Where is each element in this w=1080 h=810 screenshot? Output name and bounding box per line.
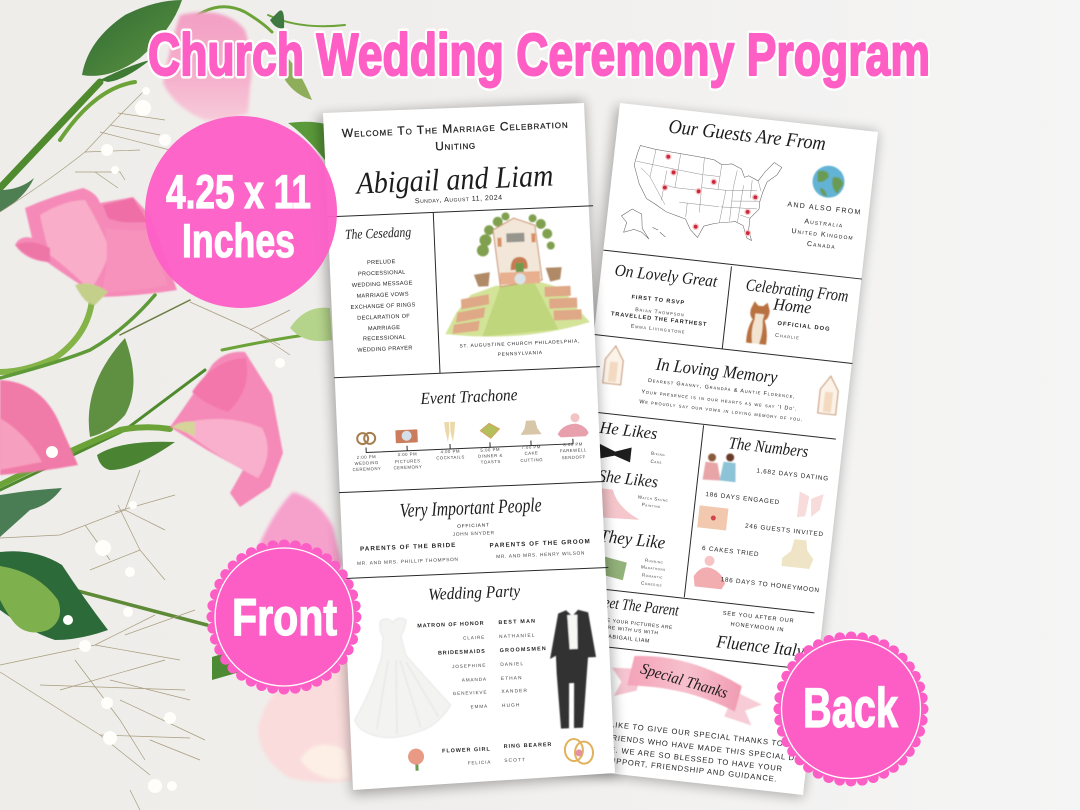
pink top bud [163, 12, 252, 120]
map pins [658, 154, 762, 236]
badge: back [779, 637, 923, 781]
panel: likes [582, 418, 682, 588]
panel: likes: Painting [641, 502, 661, 509]
middle pink flower [170, 352, 283, 507]
panel: order of ceremony: The Cesedang [345, 225, 411, 243]
pale peony [258, 655, 352, 782]
panel: likes: Cars [650, 459, 662, 465]
panel: event timeline: 3:00 PM [398, 451, 417, 457]
panel: event timeline: WEDDING [354, 460, 379, 466]
panel: very important people: JOHN SNYDER [453, 530, 495, 538]
panel: very important people: PARENTS OF THE GROOM [489, 538, 591, 549]
lawn [443, 280, 590, 339]
header: Abigail and Liam [354, 157, 554, 201]
panel: likes: Romantic [642, 572, 664, 580]
US map [619, 144, 782, 253]
foliage [475, 210, 555, 257]
panel: the numbers: 1,682 DAYS DATING [756, 468, 829, 483]
icon: tuxedo [548, 609, 599, 729]
panel: event timeline: PICTURES [395, 458, 421, 464]
icon: camera [395, 429, 418, 443]
panel: in loving memory: Dearest Granny, Grandpa & Auntie Florence, [648, 378, 796, 400]
icon: champagne hands [797, 491, 824, 520]
ribbon [607, 652, 766, 726]
icon: rings [357, 433, 375, 444]
icon: couple [703, 451, 739, 483]
panel: meet the parent: SHARE YOUR PICTURES ARE [591, 616, 673, 631]
icon: shoe [597, 488, 643, 522]
badge: 4.25 x 11 inches: Inches [182, 214, 295, 267]
badge: 4.25 x 11 inches: 4.25 x 11 [166, 165, 311, 218]
planters [474, 267, 562, 287]
also from list: Canada [807, 241, 836, 251]
panel: very important people: MR. AND MRS. HENRY WILSON [496, 550, 585, 560]
icon: bow tie [598, 444, 632, 462]
panel: order of ceremony: MARRIAGE [368, 325, 400, 332]
panel: event timeline: DINNER & [478, 453, 503, 459]
church caption: PENNSYLVANIA [498, 350, 543, 358]
panel: celebrating from home: Charlie [775, 333, 800, 341]
panel: the numbers [691, 431, 836, 600]
panel: wedding party [349, 578, 600, 773]
panel: order of ceremony: MARRIAGE VOWS [356, 292, 409, 300]
panel: special thanks [549, 646, 815, 787]
panel: very important people: MR. AND MRS. PHILLIP THOMPSON [357, 557, 459, 567]
church caption [459, 338, 581, 359]
panel: event timeline [349, 382, 590, 472]
icon: champagne [444, 422, 456, 442]
panel: likes: Running [645, 558, 664, 565]
panel: wedding party: BRIDESMAIDS [438, 649, 486, 657]
icon: cake [781, 538, 815, 569]
panel: wedding party: GROOMSMEN [500, 646, 547, 654]
panel: very important people: Very Important People [399, 494, 542, 522]
panel: order of ceremony [345, 225, 418, 354]
panel: event timeline: 4:00 PM [440, 449, 460, 454]
panel: order of ceremony: EXCHANGE OF RINGS [351, 302, 416, 311]
panel: honeymoon: HONEYMOON IN [730, 622, 785, 634]
panel: special thanks: FAMILY AND FRIENDS WHO HAVE MADE THIS SPECIAL DAY [551, 726, 806, 764]
icon: bouquet [408, 748, 425, 771]
panel: event timeline: SENDOFF [562, 454, 586, 460]
panel: wedding party: DANIEL [500, 661, 524, 668]
also from list [783, 201, 862, 253]
back card [538, 103, 878, 798]
panel: event timeline: TOASTS [481, 459, 501, 465]
icon: globe [811, 164, 846, 199]
icon: pink car [693, 554, 728, 590]
panel: likes: Watch Skiing [638, 494, 669, 503]
panel: very important people [354, 492, 591, 567]
panel: wedding party: XANDER [501, 688, 528, 695]
icon: car [557, 413, 589, 437]
panel: the numbers: 186 DAYS TO HONEYMOON [720, 576, 820, 594]
header [342, 117, 571, 208]
panel: wedding party: BEST MAN [498, 619, 536, 626]
panel: wedding party: FELICIA [468, 760, 491, 766]
icon: cake [520, 420, 542, 435]
panel: event timeline: CAKE [524, 450, 538, 456]
panel: the numbers: 246 GUESTS INVITED [745, 523, 824, 538]
panel: order of ceremony: PROCESSIONAL [358, 270, 406, 278]
panel: meet the parent: #ABIGAIL LIAM [604, 634, 650, 645]
panel: honeymoon: Fluence Italy [715, 631, 805, 661]
panel: wedding party: FLOWER GIRL [442, 747, 491, 755]
panel: on lovely great: Brian Thompson [635, 307, 685, 319]
panel: the numbers: The Numbers [728, 433, 810, 461]
panel: wedding party: CLAIRE [463, 635, 485, 641]
panel: on lovely great: TRAVELLED THE FARTHEST [611, 311, 708, 328]
panel: event timeline: FAREWELL [560, 447, 587, 453]
panel: the numbers: 6 CAKES TRIED [702, 545, 760, 558]
panel: event timeline: 7:00 PM [521, 444, 541, 450]
icon: gold rings [564, 738, 593, 764]
panel: special thanks: Special Thanks [638, 660, 730, 702]
panel: celebrating from home: Celebrating From [745, 275, 849, 306]
panel: event timeline: 5:00 PM [480, 447, 500, 453]
front card [318, 100, 618, 795]
icon: left lantern [603, 345, 625, 385]
panel: order of ceremony: PRELUDE [367, 259, 396, 266]
panel: event timeline: 2:00 PM [357, 454, 376, 460]
also from list: Australia [804, 218, 844, 230]
panel: wedding party: EMMA [471, 704, 488, 709]
also from list: AND ALSO FROM [787, 201, 862, 217]
panel: on lovely great: On Lovely Great [614, 261, 719, 291]
panel: in loving memory: We proudly say our vows in loving memory of you. [639, 399, 804, 423]
panel: order of ceremony: DECLARATION OF [357, 314, 410, 322]
panel: event timeline: CUTTING [520, 457, 543, 463]
badge: front [212, 545, 356, 689]
header: Sunday, August 11, 2024 [415, 195, 503, 205]
panel: very important people: OFFICIANT [457, 522, 490, 530]
icon: couch [597, 556, 627, 581]
church caption: ST. AUGUSTINE CHURCH PHILADELPHIA, [459, 338, 580, 349]
panel: meet the parent: Meet The Parent [592, 593, 680, 620]
panel: very important people: PARENTS OF THE BRIDE [360, 542, 457, 553]
panel: wedding party: ETHAN [501, 675, 523, 682]
panel: wedding party: Wedding Party [428, 581, 521, 604]
panel: on lovely great: FIRST TO RSVP [631, 295, 685, 306]
panel: order of ceremony: WEDDING PRAYER [357, 345, 413, 354]
panel: on lovely great [608, 261, 719, 339]
badge: front: Front [232, 589, 337, 647]
panel: in loving memory: In Loving Memory [654, 354, 779, 387]
heading: our guests are from: Our Guests Are From [667, 116, 827, 155]
panel: wedding party: HUGH [502, 702, 521, 709]
badge: 4.25 x 11 inches [145, 116, 337, 308]
panel: wedding party: RING BEARER [504, 742, 553, 750]
panel: celebrating from home: Home [772, 294, 813, 318]
panel: likes: Biking [651, 451, 666, 457]
panel: order of ceremony: WEDDING MESSAGE [352, 280, 413, 289]
panel: meet the parent: SHARE WITH US WITH [596, 624, 659, 637]
benches [451, 294, 490, 334]
panel: in loving memory: Your presence is in our hearts as we say 'I Do'. [641, 389, 798, 413]
rose under badge [260, 492, 342, 565]
panel: celebrating from home [740, 275, 849, 353]
panel: special thanks: POSSIBLE. WE ARE SO BLESSED TO HAVE YOUR [572, 741, 783, 773]
panel: event timeline: 8:00 PM [563, 441, 583, 447]
panel: special thanks: LOVE, SUPPORT, FRIENDSHIP AND GUIDANCE. [575, 752, 778, 784]
panel: celebrating from home: OFFICIAL DOG [777, 321, 831, 333]
panel: wedding party: NATHANIEL [499, 633, 536, 640]
panel: wedding party: JOSEPHINE [452, 663, 486, 669]
panel: wedding party: AMANDA [462, 677, 487, 683]
panel: honeymoon: SEE YOU AFTER OUR [722, 611, 795, 625]
panel: in loving memory [601, 345, 840, 427]
panel: special thanks: WE WOULD LIKE TO GIVE OUR SPECIAL THANKS TO ALL [558, 714, 802, 750]
panel: honeymoon [715, 610, 808, 661]
panel: event timeline: COCKTAILS [436, 454, 465, 461]
church illustration [440, 209, 590, 339]
panel: wedding party: SCOTT [504, 757, 526, 764]
panel: event timeline: CEREMONY [352, 466, 381, 472]
icon: envelope [697, 505, 728, 530]
stems [0, 7, 345, 625]
panel: likes: Comedies [641, 580, 662, 588]
badge: back: Back [803, 676, 899, 739]
panel: likes: She Likes [597, 466, 659, 492]
panel: the numbers: 186 DAYS ENGAGED [705, 491, 780, 506]
left pink flower [0, 380, 78, 475]
panel: likes: Marathons [641, 564, 666, 572]
icon: wedding dress [350, 616, 452, 739]
icon: toast [480, 423, 500, 439]
header: Uniting [435, 138, 476, 153]
panel: on lovely great: Emma Livingstone [630, 324, 686, 336]
header: Welcome To The Marriage Celebration [342, 117, 568, 140]
panel: meet the parent [588, 593, 680, 648]
panel: order of ceremony: RECESSIONAL [363, 335, 406, 343]
panel: likes: He Likes [598, 418, 659, 443]
icon: dog [746, 301, 771, 345]
panel: event timeline: Event Trachone [419, 385, 518, 408]
panel: guests map [619, 112, 870, 262]
panel: wedding party: MATRON OF HONOR [417, 621, 485, 630]
panel: likes: They Like [599, 525, 666, 553]
also from list: United Kingdom [791, 228, 854, 242]
panel: event timeline: CEREMONY [393, 464, 422, 470]
panel: wedding party: GENEVIEVE [453, 690, 488, 696]
flowers and greenery [0, 0, 352, 810]
icon: right lantern [818, 375, 840, 415]
building [493, 217, 542, 287]
big pink flower [15, 188, 177, 305]
baby's breath [0, 90, 290, 810]
leaves [82, 0, 182, 76]
